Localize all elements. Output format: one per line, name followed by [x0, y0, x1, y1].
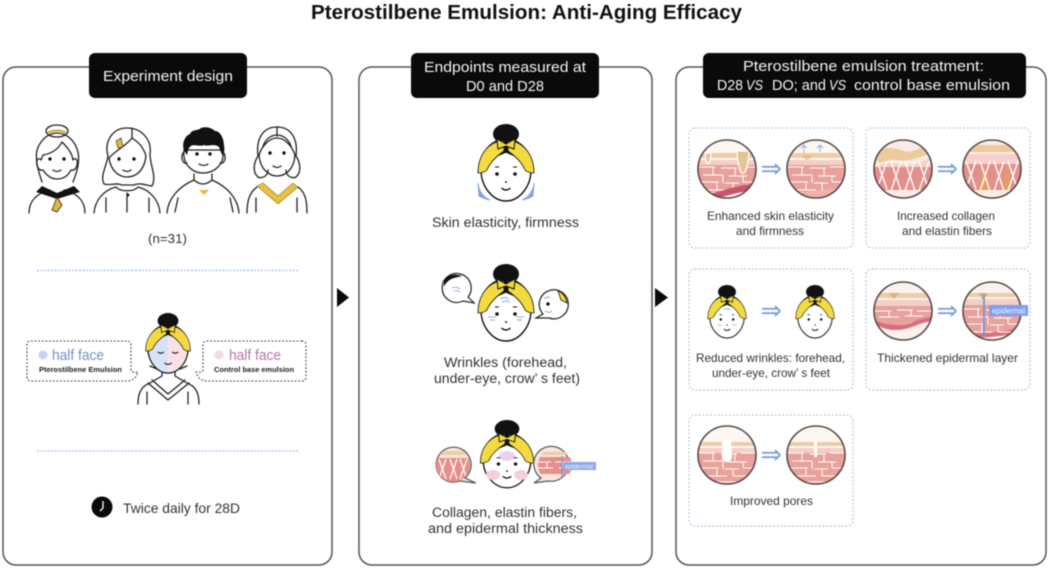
- card: epidermal: [866, 269, 1030, 390]
- bubble: collagen: [436, 447, 476, 483]
- callout: control half face: Control base emulsion: [214, 365, 294, 374]
- caption: Improved pores: [730, 494, 813, 508]
- skin after: [787, 140, 845, 198]
- epidermis before: [874, 282, 932, 340]
- heading: treatment results: control base emulsion: [854, 77, 1010, 94]
- collagen after: [963, 140, 1021, 198]
- panel: endpoints: [359, 53, 652, 565]
- arrow: endpoints to results: [655, 288, 668, 307]
- caption: under-eye, crow’ s feet: [712, 366, 831, 380]
- caption: [707, 209, 834, 238]
- collagen before: [874, 140, 932, 198]
- label: collagen and thickness: Collagen, elastin fibers,: [432, 505, 577, 520]
- participant 3: [167, 127, 239, 213]
- label: wrinkles: under-eye, crow’ s feet): [434, 371, 580, 386]
- label: wrinkles: [434, 355, 580, 386]
- card: wrinkles: [689, 269, 853, 390]
- icon: clock: [92, 496, 112, 518]
- label: firmness: Skin elasticity, firmness: [432, 215, 579, 230]
- label: collagen and thickness: [428, 505, 583, 536]
- title: Pterostilbene Emulsion: Anti-Aging Efficacy: [311, 2, 743, 24]
- participant 2: [94, 128, 160, 213]
- icon: wrinkles face: [442, 264, 568, 341]
- epidermis after: [963, 282, 1021, 340]
- icon: collagen face: [436, 420, 596, 488]
- caption: Enhanced skin elasticity: [707, 209, 834, 223]
- heading: endpoints: [411, 53, 599, 98]
- card: pores: [689, 415, 853, 526]
- pores before: [698, 426, 756, 484]
- heading: endpoints: Endpoints measured at: [424, 59, 587, 76]
- bubble: crow's feet: [536, 290, 568, 319]
- caption: Thickened epidermal layer: [877, 351, 1018, 365]
- panel: experiment design: [3, 53, 332, 565]
- arrow: [938, 164, 956, 174]
- panel: treatment results: [676, 53, 1046, 565]
- caption: and firmness: [736, 224, 804, 238]
- caption: Reduced wrinkles: forehead,: [696, 351, 845, 365]
- card: collagen: [866, 128, 1030, 248]
- callout: pterostilbene half face: Pterostilbene Emulsion: [39, 365, 122, 374]
- bubble: forehead: [442, 273, 474, 303]
- tag: epidermal: epidermal: [565, 464, 594, 470]
- callout: control half face: half face: [229, 347, 281, 364]
- heading: treatment results: VS: [829, 77, 846, 94]
- caption: Increased collagen: [897, 209, 995, 223]
- heading: treatment results: Pterostilbene emulsion treatment:: [743, 58, 984, 75]
- face before: [708, 285, 746, 338]
- arrow: [762, 450, 780, 460]
- callout: control half face: [196, 341, 306, 381]
- heading: treatment results: [703, 53, 1026, 98]
- bubble: epidermal: [534, 446, 572, 483]
- tag: epidermal: epidermal: [992, 306, 1025, 316]
- participant 4: [247, 127, 307, 213]
- heading: treatment results: D28: [717, 77, 743, 94]
- icon: half-face woman: [138, 313, 199, 404]
- callout: pterostilbene half face: [27, 341, 138, 381]
- thickness marker: [983, 294, 985, 337]
- face after: [796, 285, 834, 338]
- icon: four participants: [29, 125, 307, 213]
- callout: pterostilbene half face: half face: [52, 347, 104, 364]
- participant 1: [29, 125, 85, 213]
- label: collagen and thickness: and epidermal thickness: [428, 521, 583, 536]
- heading: treatment results: VS: [746, 77, 763, 94]
- heading: treatment results: DO; and: [772, 77, 826, 94]
- skin before: [698, 140, 756, 201]
- card: skin elasticity: [689, 128, 853, 248]
- arrow: [938, 306, 956, 316]
- heading: experiment design: Experiment design: [103, 68, 233, 85]
- pores after: [787, 426, 845, 484]
- sample size: (n=31): [148, 231, 187, 246]
- dosing frequency: Twice daily for 28D: [123, 500, 240, 516]
- heading: experiment design: [89, 53, 247, 98]
- icon: firmness face: [478, 124, 534, 201]
- label: wrinkles: Wrinkles (forehead,: [444, 355, 567, 370]
- caption: [696, 351, 845, 380]
- caption: and elastin fibers: [902, 224, 992, 238]
- arrow: [762, 164, 780, 174]
- caption: [897, 209, 995, 238]
- arrow: [762, 306, 780, 316]
- arrow: design to endpoints: [337, 288, 349, 307]
- heading: endpoints: D0 and D28: [466, 78, 544, 95]
